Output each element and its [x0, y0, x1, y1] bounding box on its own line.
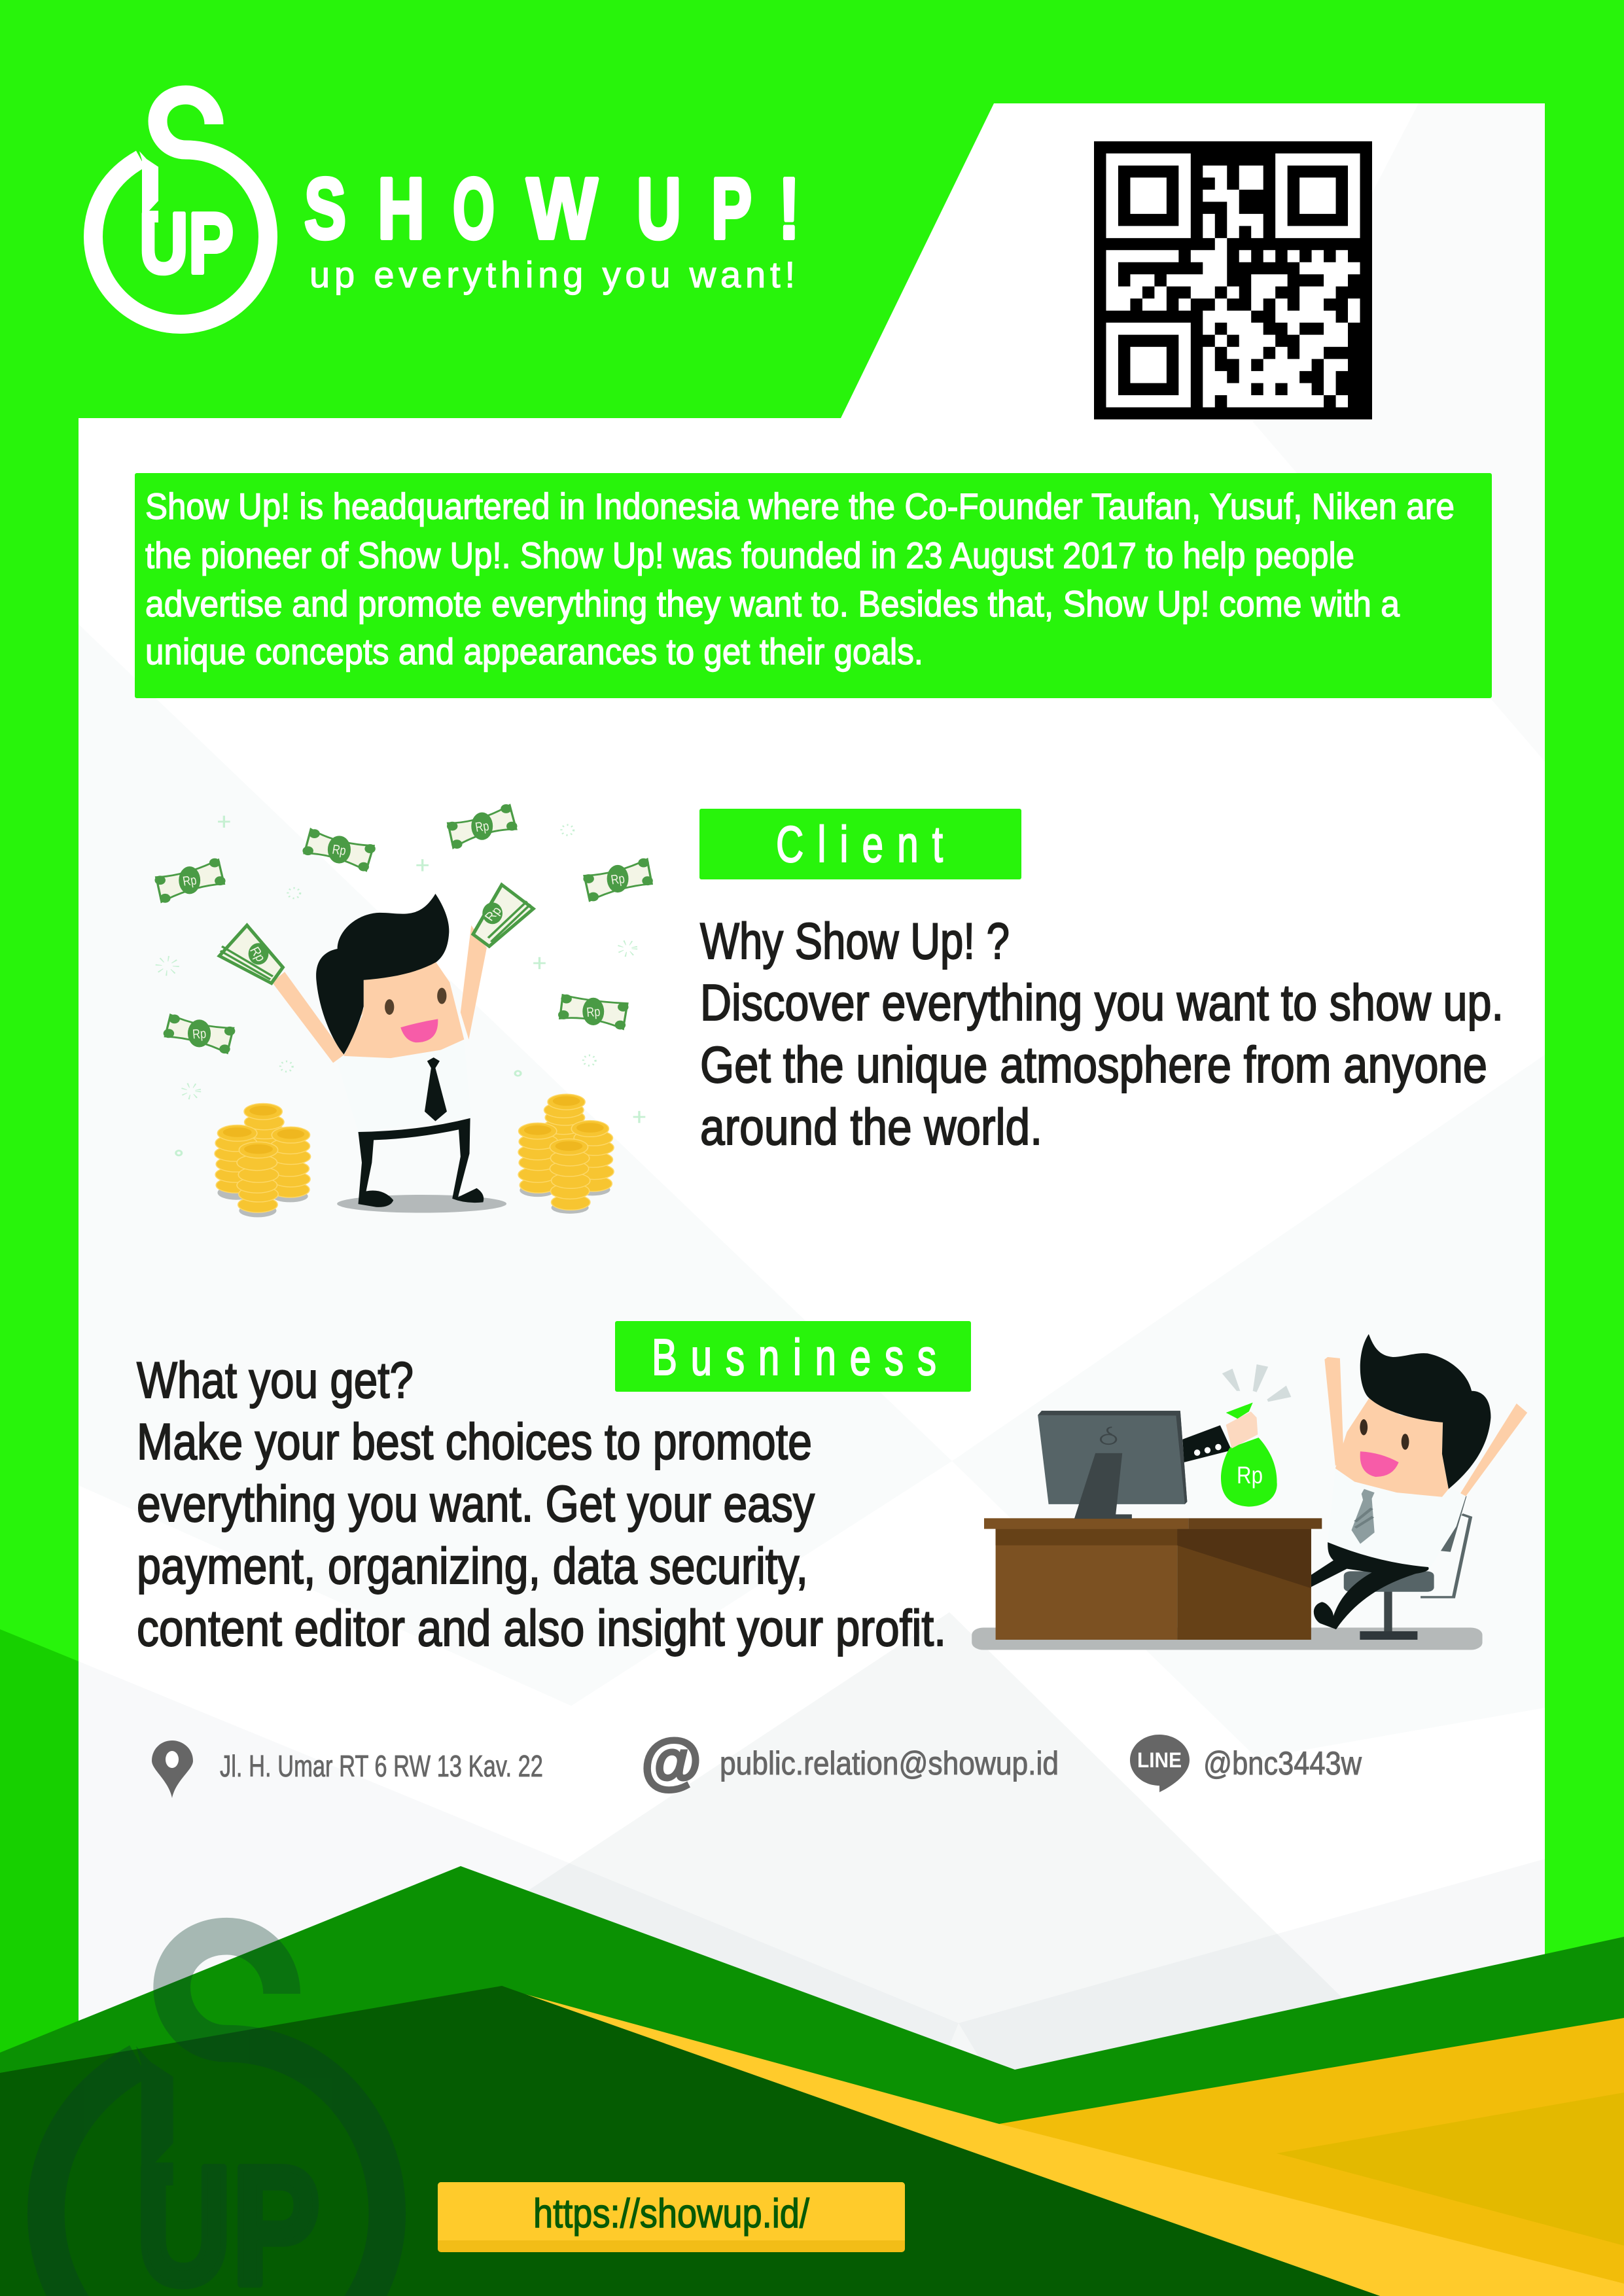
title: H [378, 160, 425, 256]
banknotes [156, 805, 652, 1053]
watermark logo [46, 1936, 387, 2296]
arm with money bag [1182, 1403, 1277, 1507]
button: Client: Client [776, 816, 943, 873]
cash in hands: Rp [482, 904, 505, 924]
intro text [145, 486, 1455, 672]
contact: email: public.relation@showup.id [720, 1745, 1059, 1782]
intro text: the pioneer of Show Up!. Show Up! was founded in 23 August 2017 to help people [145, 535, 1354, 576]
cash in hands [219, 885, 533, 983]
website button [438, 2182, 905, 2252]
client text: around the world. [700, 1098, 1042, 1156]
decorative sparkles [159, 816, 645, 1156]
title: W [527, 160, 597, 256]
contact: LINE: LINE [1137, 1748, 1182, 1772]
monitor [1038, 1411, 1187, 1519]
intro text: unique concepts and appearances to get their goals. [145, 631, 923, 672]
floor shadow [337, 1195, 506, 1212]
business text: What you get? [137, 1351, 414, 1409]
title: S [304, 160, 346, 256]
client text: Discover everything you want to show up. [700, 974, 1504, 1031]
desk [984, 1518, 1322, 1640]
contact: address [152, 1740, 543, 1798]
bottom geometric banner [0, 1866, 1624, 2296]
button: Busniness [615, 1321, 971, 1392]
illustration: man throwing money: Rp [610, 871, 626, 887]
darker left border [0, 1629, 79, 2159]
illustration: man throwing money: Rp [331, 842, 347, 858]
client text: Why Show Up! ? [700, 912, 1010, 970]
intro text: Show Up! is headquartered in Indonesia where the Co-Founder Taufan, Yusuf, Niken are [145, 486, 1455, 527]
illustration: man throwing money: Rp [182, 872, 198, 889]
client text [700, 912, 1504, 1156]
logo: UP [139, 195, 234, 292]
title: O [453, 160, 495, 256]
website button: https://showup.id/ [533, 2191, 810, 2236]
illustration: man throwing money: Rp [474, 819, 490, 835]
man [272, 894, 487, 1207]
illustration: man throwing money [154, 804, 653, 1217]
arm with money bag: Rp [1237, 1462, 1263, 1489]
illustration: man at desk receiving money [972, 1334, 1527, 1650]
button: Client [699, 809, 1021, 879]
seated man [1311, 1334, 1527, 1629]
contact: email [641, 1727, 1059, 1796]
contact: LINE: @bnc3443w [1203, 1745, 1362, 1782]
business text: content editor and also insight your profit. [137, 1599, 946, 1657]
contact: LINE [1130, 1735, 1362, 1792]
intro text: advertise and promote everything they want to. Besides that, Show Up! come with a [145, 583, 1400, 624]
business text: payment, organizing, data security, [137, 1537, 808, 1595]
title [304, 160, 800, 256]
sparkles [1222, 1364, 1291, 1402]
business text: Make your best choices to promote [137, 1413, 812, 1470]
button: Busniness: Busniness [652, 1329, 936, 1386]
illustration: man throwing money: Rp [192, 1026, 207, 1042]
title: U [637, 160, 681, 256]
logo [93, 95, 268, 325]
title: P [711, 160, 752, 256]
business text: everything you want. Get your easy [137, 1475, 815, 1532]
title: ! [779, 160, 800, 256]
client text: Get the unique atmosphere from anyone [700, 1036, 1487, 1093]
floor [972, 1628, 1483, 1650]
business text [137, 1351, 946, 1657]
tagline: up everything you want! [309, 254, 795, 295]
QR code [1094, 141, 1372, 419]
contact: address: Jl. H. Umar RT 6 RW 13 Kav. 22 [220, 1749, 543, 1783]
cash in hands: Rp [247, 945, 268, 964]
coin stacks [215, 1094, 614, 1217]
contact: email: @ [641, 1727, 701, 1796]
chair [1344, 1496, 1470, 1640]
intro panel [135, 473, 1492, 698]
illustration: man throwing money: Rp [586, 1004, 601, 1019]
